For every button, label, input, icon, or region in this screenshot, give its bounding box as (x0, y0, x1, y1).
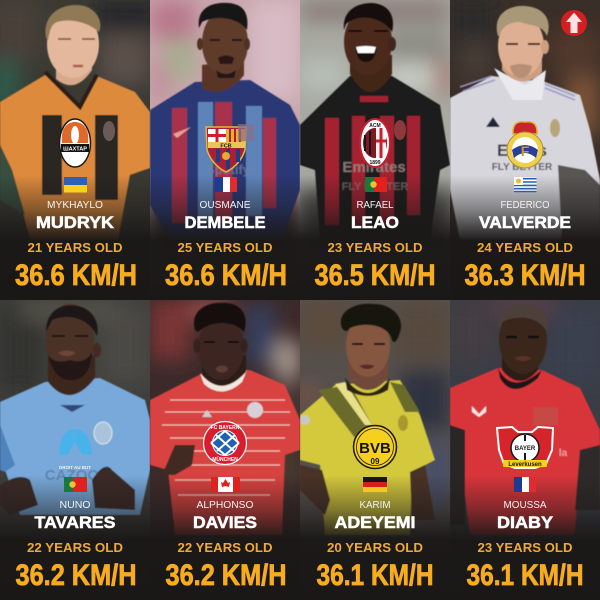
icon: Leverkusen crest: BAYER (515, 446, 536, 452)
icon: Dortmund crest (354, 426, 396, 468)
icon: Marseille crest: DROIT AU BUT (59, 465, 91, 470)
surname: DIABY (497, 514, 553, 532)
surname: DEMBELE (184, 214, 266, 232)
first name: RAFAEL (356, 199, 394, 211)
first name: KARIM (360, 499, 390, 511)
icon: Barcelona crest: FCB (220, 144, 232, 150)
photo: Adeyemi in Dortmund shirt: e on (359, 452, 383, 466)
top speed: 36.6 KM/H (15, 259, 137, 292)
fade overlay (0, 175, 150, 300)
photo: Tavares in Marseille shirt (0, 300, 150, 600)
panel: Adeyemi (300, 300, 450, 592)
icon: Shakhtar crest (60, 119, 115, 167)
icon: Shakhtar crest: ШАХТАР (63, 146, 87, 152)
fade overlay (450, 475, 600, 600)
panel: Valverde (450, 0, 600, 292)
flag: France (215, 177, 237, 192)
fade overlay (0, 475, 150, 600)
photo: Valverde in Real Madrid shirt: Em es (497, 141, 547, 160)
age: 23 YEARS OLD (328, 240, 422, 255)
surname: DAVIES (193, 514, 257, 532)
photo: Dembele in Barcelona shirt: Spotify (206, 162, 251, 177)
fade overlay (300, 475, 450, 600)
icon: Leverkusen crest (497, 427, 553, 468)
fade overlay (150, 175, 300, 300)
photo: Diaby in Leverkusen shirt (450, 300, 600, 600)
flag: Canada (211, 477, 240, 492)
first name: OUSMANE (200, 199, 250, 211)
surname: LEAO (351, 214, 399, 232)
first name: NUNO (60, 499, 90, 511)
icon: Barcelona crest (206, 124, 254, 172)
photo: Dembele in Barcelona shirt (150, 0, 300, 300)
age: 22 YEARS OLD (27, 540, 123, 555)
photo: Diaby in Leverkusen shirt: Bar (504, 435, 528, 451)
icon: Marseille crest (59, 429, 92, 470)
photo: Diaby in Leverkusen shirt: la (559, 448, 568, 459)
fade overlay (150, 475, 300, 600)
icon: Dortmund crest: BVB (359, 440, 391, 457)
flag: France (514, 477, 536, 492)
first name: FEDERICO (500, 199, 550, 211)
photo: Leao in Milan shirt: FLY BETTER (342, 181, 408, 193)
icon: AC Milan crest: ACM (369, 123, 381, 129)
photo: Leao in Milan shirt: Emirates (342, 159, 406, 176)
panel: Davies (150, 300, 300, 592)
icon: Bayern Munich crest: MÜNCHEN (212, 456, 238, 463)
photo: Tavares in Marseille shirt: CAZOO (45, 467, 99, 484)
age: 24 YEARS OLD (477, 240, 573, 255)
flag: Ukraine (64, 177, 87, 192)
age: 23 YEARS OLD (478, 540, 572, 555)
age: 20 YEARS OLD (327, 540, 423, 555)
icon: Bayern Munich crest: FC BAYERN (211, 425, 240, 431)
flag: Germany (363, 477, 387, 492)
panel: Leao (300, 0, 450, 292)
flag: Portugal (365, 177, 387, 192)
icon: Real Madrid crest (507, 122, 543, 168)
photo: Adeyemi in Dortmund shirt (300, 300, 450, 600)
photo: Mudryk in orange Shakhtar shirt (0, 0, 160, 300)
photo: Davies in Bayern shirt (150, 300, 300, 600)
fade overlay (450, 175, 600, 300)
icon: red up arrow badge (561, 10, 587, 36)
age: 21 YEARS OLD (28, 240, 122, 255)
photo: Valverde in Real Madrid shirt (450, 0, 600, 300)
panel: Dembele (150, 0, 300, 292)
surname: MUDRYK (36, 214, 114, 232)
surname: VALVERDE (479, 214, 571, 232)
age: 22 YEARS OLD (178, 540, 272, 555)
flag: Portugal (64, 477, 87, 492)
fade overlay (300, 175, 450, 300)
icon: Leverkusen crest: Leverkusen (508, 462, 542, 468)
surname: ADEYEMI (334, 514, 416, 532)
icon: Dortmund crest: 09 (371, 457, 380, 466)
surname: TAVARES (34, 514, 116, 532)
first name: ALPHONSO (196, 499, 254, 511)
panel: Diaby (450, 300, 600, 592)
panel: Mudryk (0, 0, 150, 292)
icon: Bayern Munich crest (204, 422, 246, 464)
icon: Real Madrid crest: F (521, 143, 530, 159)
age: 25 YEARS OLD (178, 240, 272, 255)
icon: AC Milan crest (360, 119, 406, 167)
flag: Uruguay (514, 177, 536, 192)
photo: Leao in Milan shirt (300, 0, 450, 300)
icon: AC Milan crest: 1899 (369, 160, 381, 166)
photo: Valverde in Real Madrid shirt: FLY BETTER (492, 162, 553, 173)
first name: MOUSSA (504, 499, 546, 511)
first name: MYKHAYLO (47, 199, 103, 211)
panel: Tavares (0, 300, 150, 592)
